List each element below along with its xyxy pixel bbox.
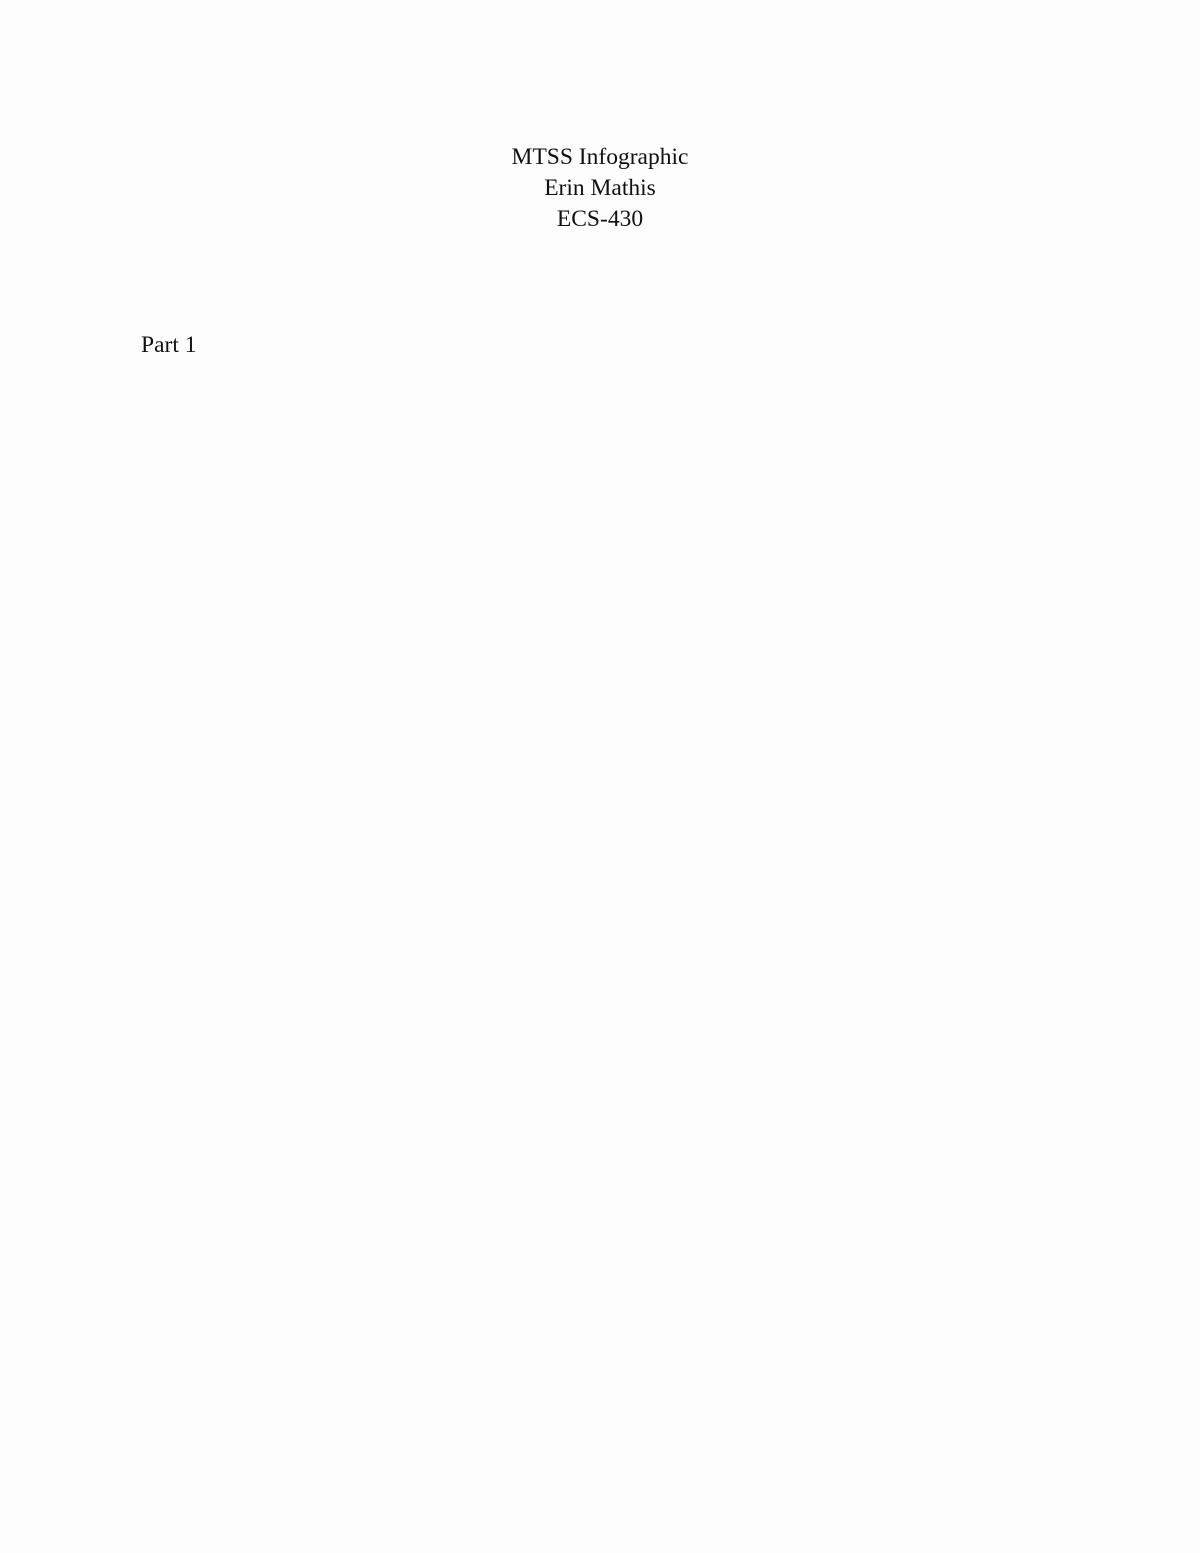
section heading: Part 1: Part 1 <box>141 332 196 358</box>
title line: MTSS Infographic <box>512 144 688 170</box>
course line: ECS-430 <box>557 206 643 232</box>
author line: Erin Mathis <box>544 175 656 201</box>
title block <box>512 144 688 232</box>
